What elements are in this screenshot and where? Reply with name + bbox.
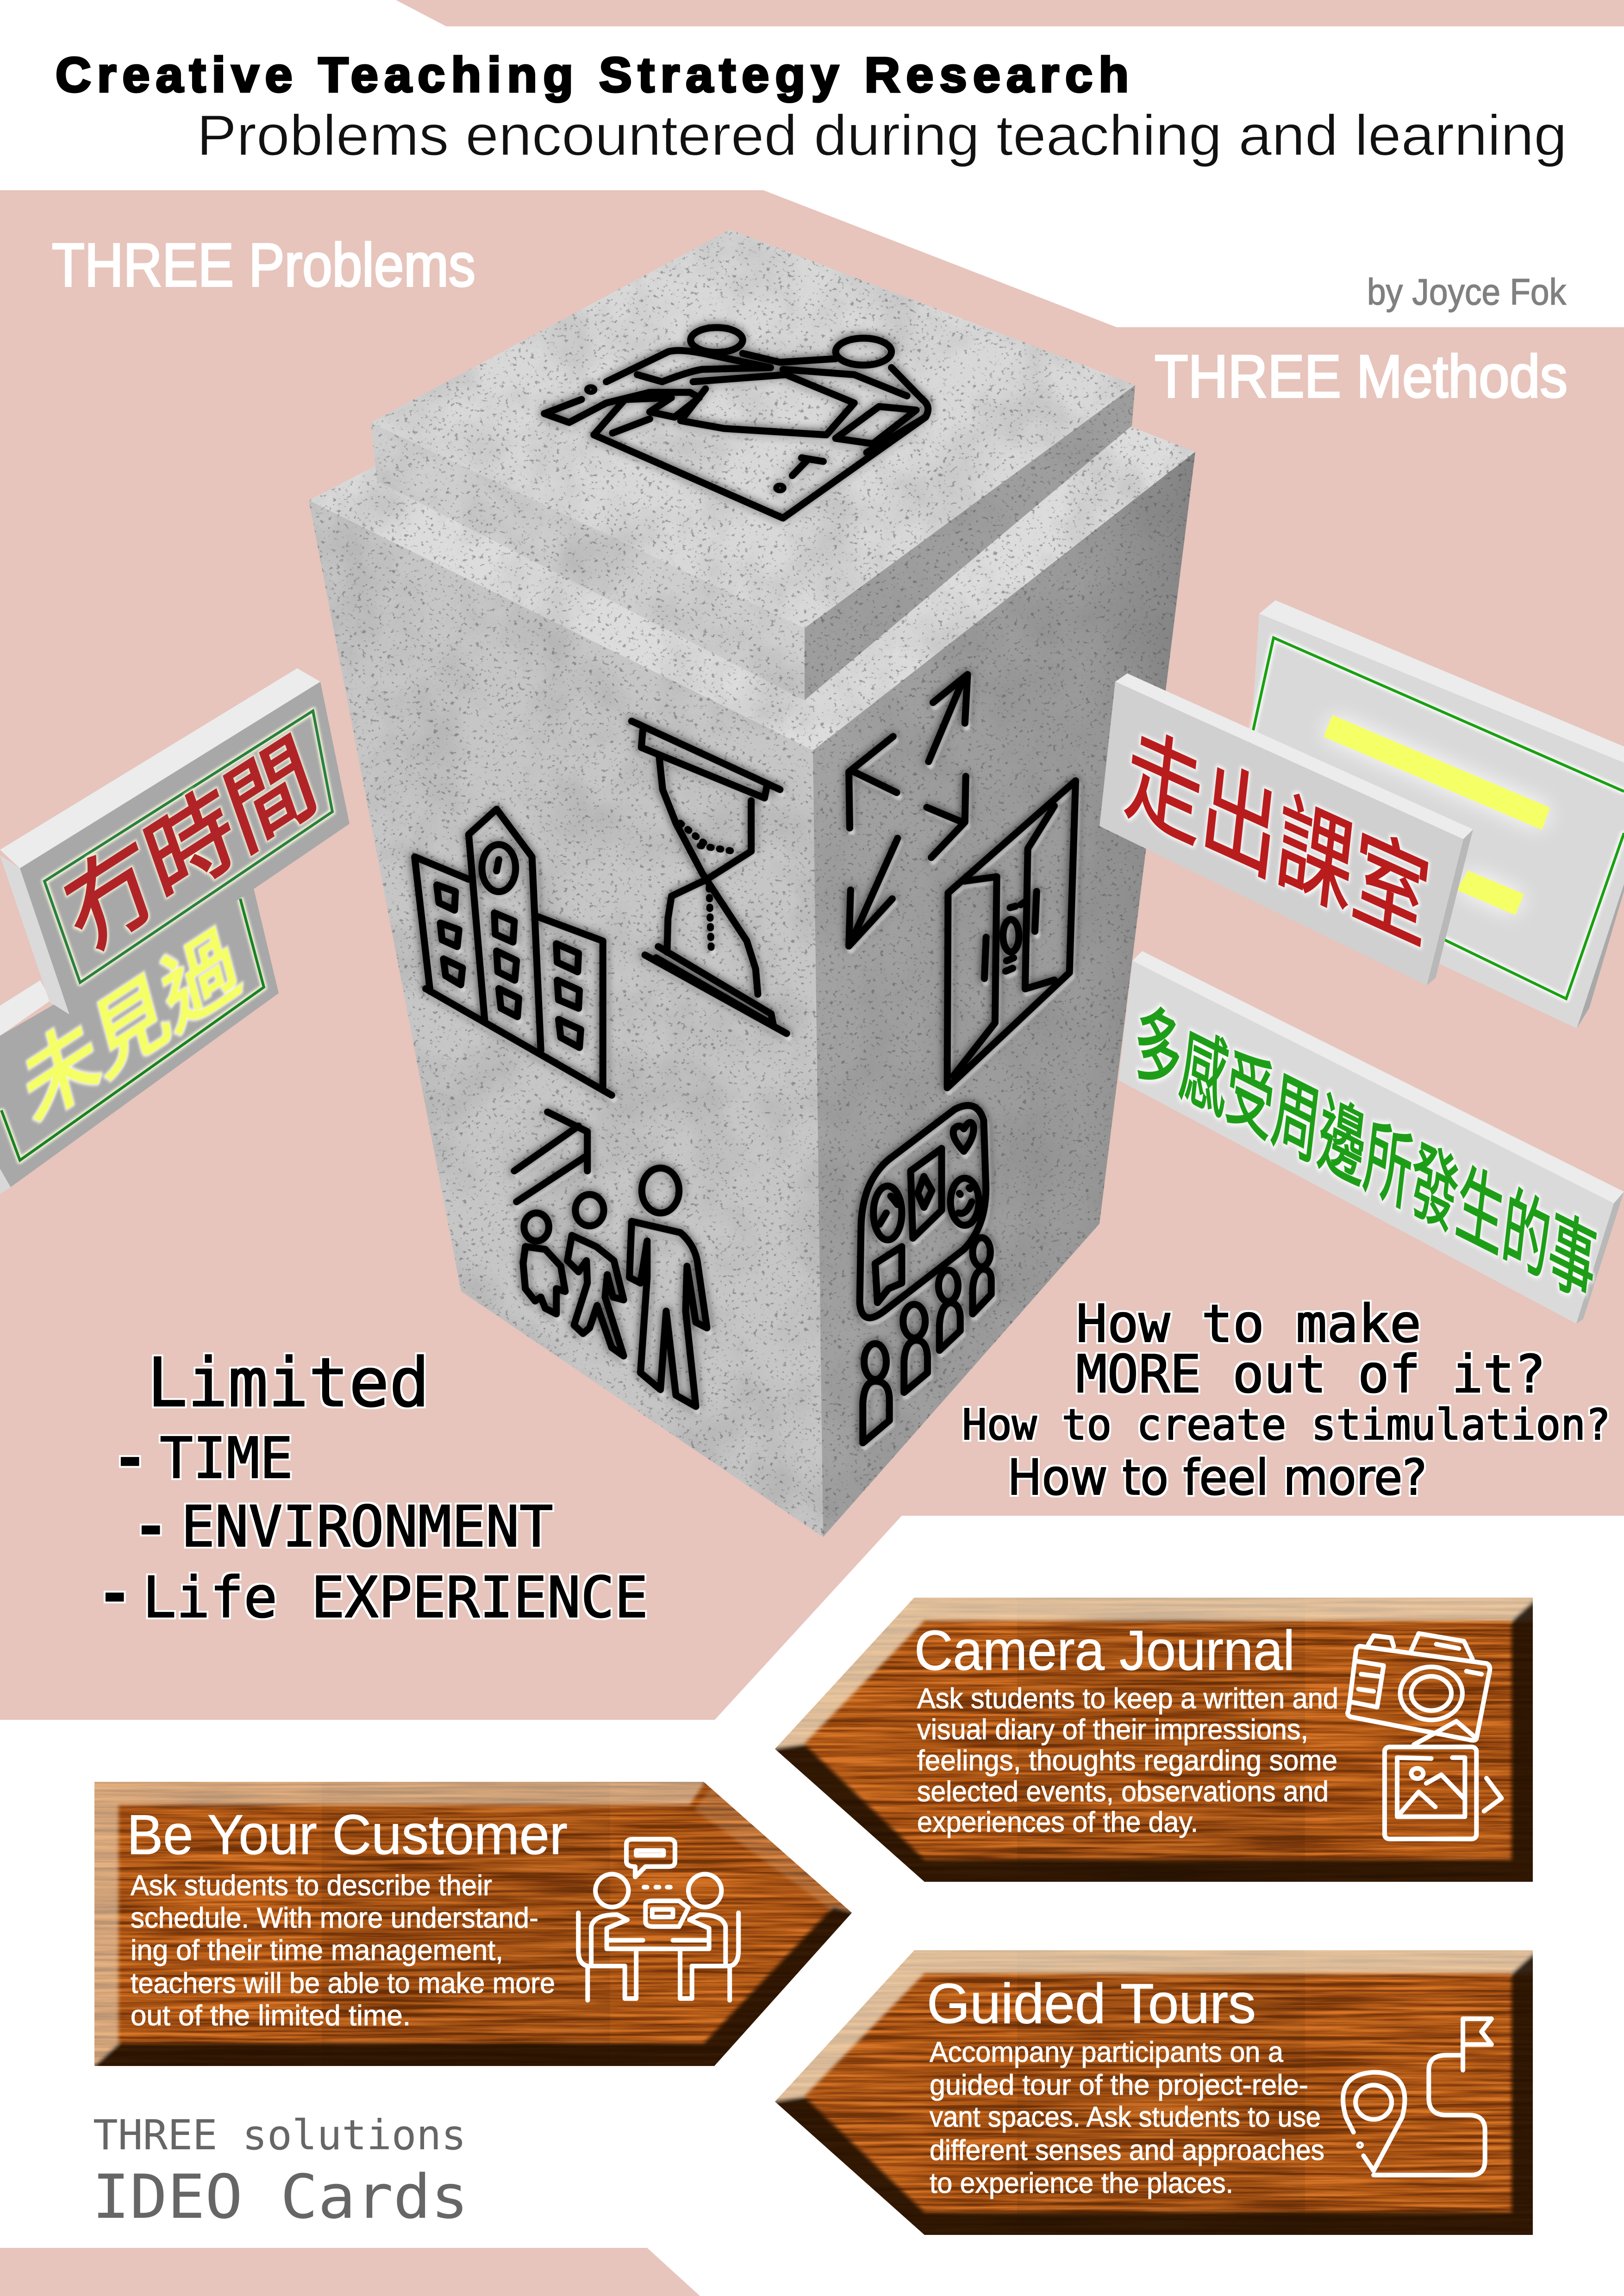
card: camera journal (768, 1592, 1537, 1888)
sign face (0, 889, 279, 1187)
icon: two people talking at a table (578, 1839, 738, 2000)
title: Creative Teaching Strategy Research (56, 48, 1129, 102)
question line 1: How to make (1076, 1294, 1421, 1354)
wood arrow (768, 1592, 1537, 1888)
icon: hourglass (631, 721, 787, 1033)
card body: guided tour of the project-rele- (930, 2069, 1308, 2101)
question line 3: How to create stimulation? (962, 1400, 1611, 1450)
sign top edge (1132, 951, 1624, 1203)
icon: expanding arrows (849, 674, 968, 946)
card title: Be Your Customer (127, 1803, 568, 1866)
background: pink top band (396, 0, 1624, 26)
background: pink bottom band (0, 2248, 700, 2296)
sign text: 冇時間 (54, 720, 328, 973)
sign top edge (0, 980, 51, 1036)
heading: three methods: THREE Methods (1155, 342, 1568, 410)
background: main pink panel (0, 190, 1624, 1720)
card body: teachers will be able to make more (131, 1967, 555, 1999)
sign: 未見過 (0, 889, 279, 1194)
sign side edge (0, 855, 69, 1014)
card body: schedule. With more understand- (131, 1902, 538, 1934)
limited life experience: Life EXPERIENCE (143, 1565, 648, 1630)
pillar ledge (309, 428, 1195, 750)
card body: feelings, thoughts regarding some (917, 1745, 1337, 1777)
sign: 走出課室 (1099, 673, 1473, 985)
card body: ing of their time management, (131, 1935, 503, 1966)
bullet dash: - (98, 1561, 131, 1627)
author credit: by Joyce Fok (1367, 271, 1567, 312)
sign side edge (0, 1169, 11, 1194)
wood arrow (90, 1777, 856, 2071)
icon: handshake over table on cap (544, 328, 928, 518)
card body (131, 1870, 555, 2032)
panel top edge (1259, 600, 1624, 763)
card body: different senses and approaches (930, 2134, 1324, 2166)
bullet dash: - (113, 1425, 147, 1491)
engraved icons (415, 328, 1075, 1443)
text: limited list (98, 1344, 648, 1630)
sign face (1118, 961, 1614, 1324)
yellow bars (1324, 715, 1550, 915)
sign text: 未見過 (14, 912, 248, 1140)
card body (917, 1683, 1338, 1838)
icon: camera and photo (1348, 1634, 1501, 1839)
panel face (1242, 614, 1624, 1028)
limited time: TIME (160, 1425, 293, 1491)
card body: out of the limited time. (131, 2000, 411, 2032)
sign top edge (0, 668, 320, 868)
concrete pillar (301, 222, 1204, 1546)
icon: map pin and route flag (1343, 2019, 1492, 2175)
sign text: 多感受周邊所發生的事 (1130, 991, 1600, 1316)
pillar cap left face (371, 423, 805, 700)
bullet dash: - (134, 1494, 168, 1560)
limited heading: Limited (147, 1344, 430, 1422)
question line 4: How to feel more? (1007, 1449, 1427, 1506)
pillar cap top face (371, 230, 1135, 628)
sign border (1, 899, 264, 1160)
pillar cap right face (805, 385, 1135, 700)
card title: Camera Journal (914, 1619, 1295, 1682)
sign: back panel with yellow bars (1241, 600, 1624, 1028)
heading: three problems: THREE Problems (52, 231, 475, 299)
sign: 冇時間 (0, 668, 350, 1014)
text: ideo cards: IDEO Cards (92, 2161, 468, 2232)
sign right edge (1427, 829, 1473, 985)
sign right edge (1576, 1192, 1624, 1324)
card body: vant spaces. Ask students to use (930, 2101, 1321, 2133)
card body: experiences of the day. (917, 1806, 1198, 1838)
card title: Guided Tours (927, 1972, 1256, 2035)
concrete texture (301, 222, 1204, 1546)
icon: family growth with arrow (514, 1112, 707, 1406)
wood arrow (768, 1945, 1537, 2240)
card body: selected events, observations and (917, 1776, 1329, 1808)
text: three solutions: THREE solutions (93, 2111, 466, 2159)
sign face (1099, 682, 1463, 985)
sign border (44, 711, 332, 983)
subtitle: Problems encountered during teaching and learning (197, 104, 1567, 168)
text: questions (962, 1294, 1611, 1506)
sign: 多感受周邊所發生的事 (1118, 951, 1624, 1324)
card: be your customer (90, 1777, 856, 2071)
icon: open door with light bulb (947, 781, 1075, 1088)
icon: school building (415, 809, 612, 1095)
question line 2: MORE out of it? (1076, 1344, 1546, 1405)
pillar lower block right face (813, 452, 1195, 1537)
icon: audience with cards (860, 1106, 991, 1443)
card body: Accompany participants on a (930, 2036, 1283, 2068)
card body: visual diary of their impressions, (917, 1714, 1308, 1746)
card body (930, 2036, 1324, 2199)
sign top edge (1115, 673, 1473, 839)
panel right edge (1577, 884, 1624, 1028)
limited environment: ENVIRONMENT (181, 1494, 553, 1560)
card body: to experience the places. (930, 2167, 1233, 2199)
sign face (20, 682, 350, 1014)
card body: Ask students to describe their (131, 1870, 492, 1902)
card body: Ask students to keep a written and (917, 1683, 1338, 1715)
pillar lower block left face (309, 500, 823, 1537)
sign text: 走出課室 (1120, 713, 1435, 964)
card: guided tours (768, 1945, 1537, 2240)
panel border (1241, 638, 1624, 999)
